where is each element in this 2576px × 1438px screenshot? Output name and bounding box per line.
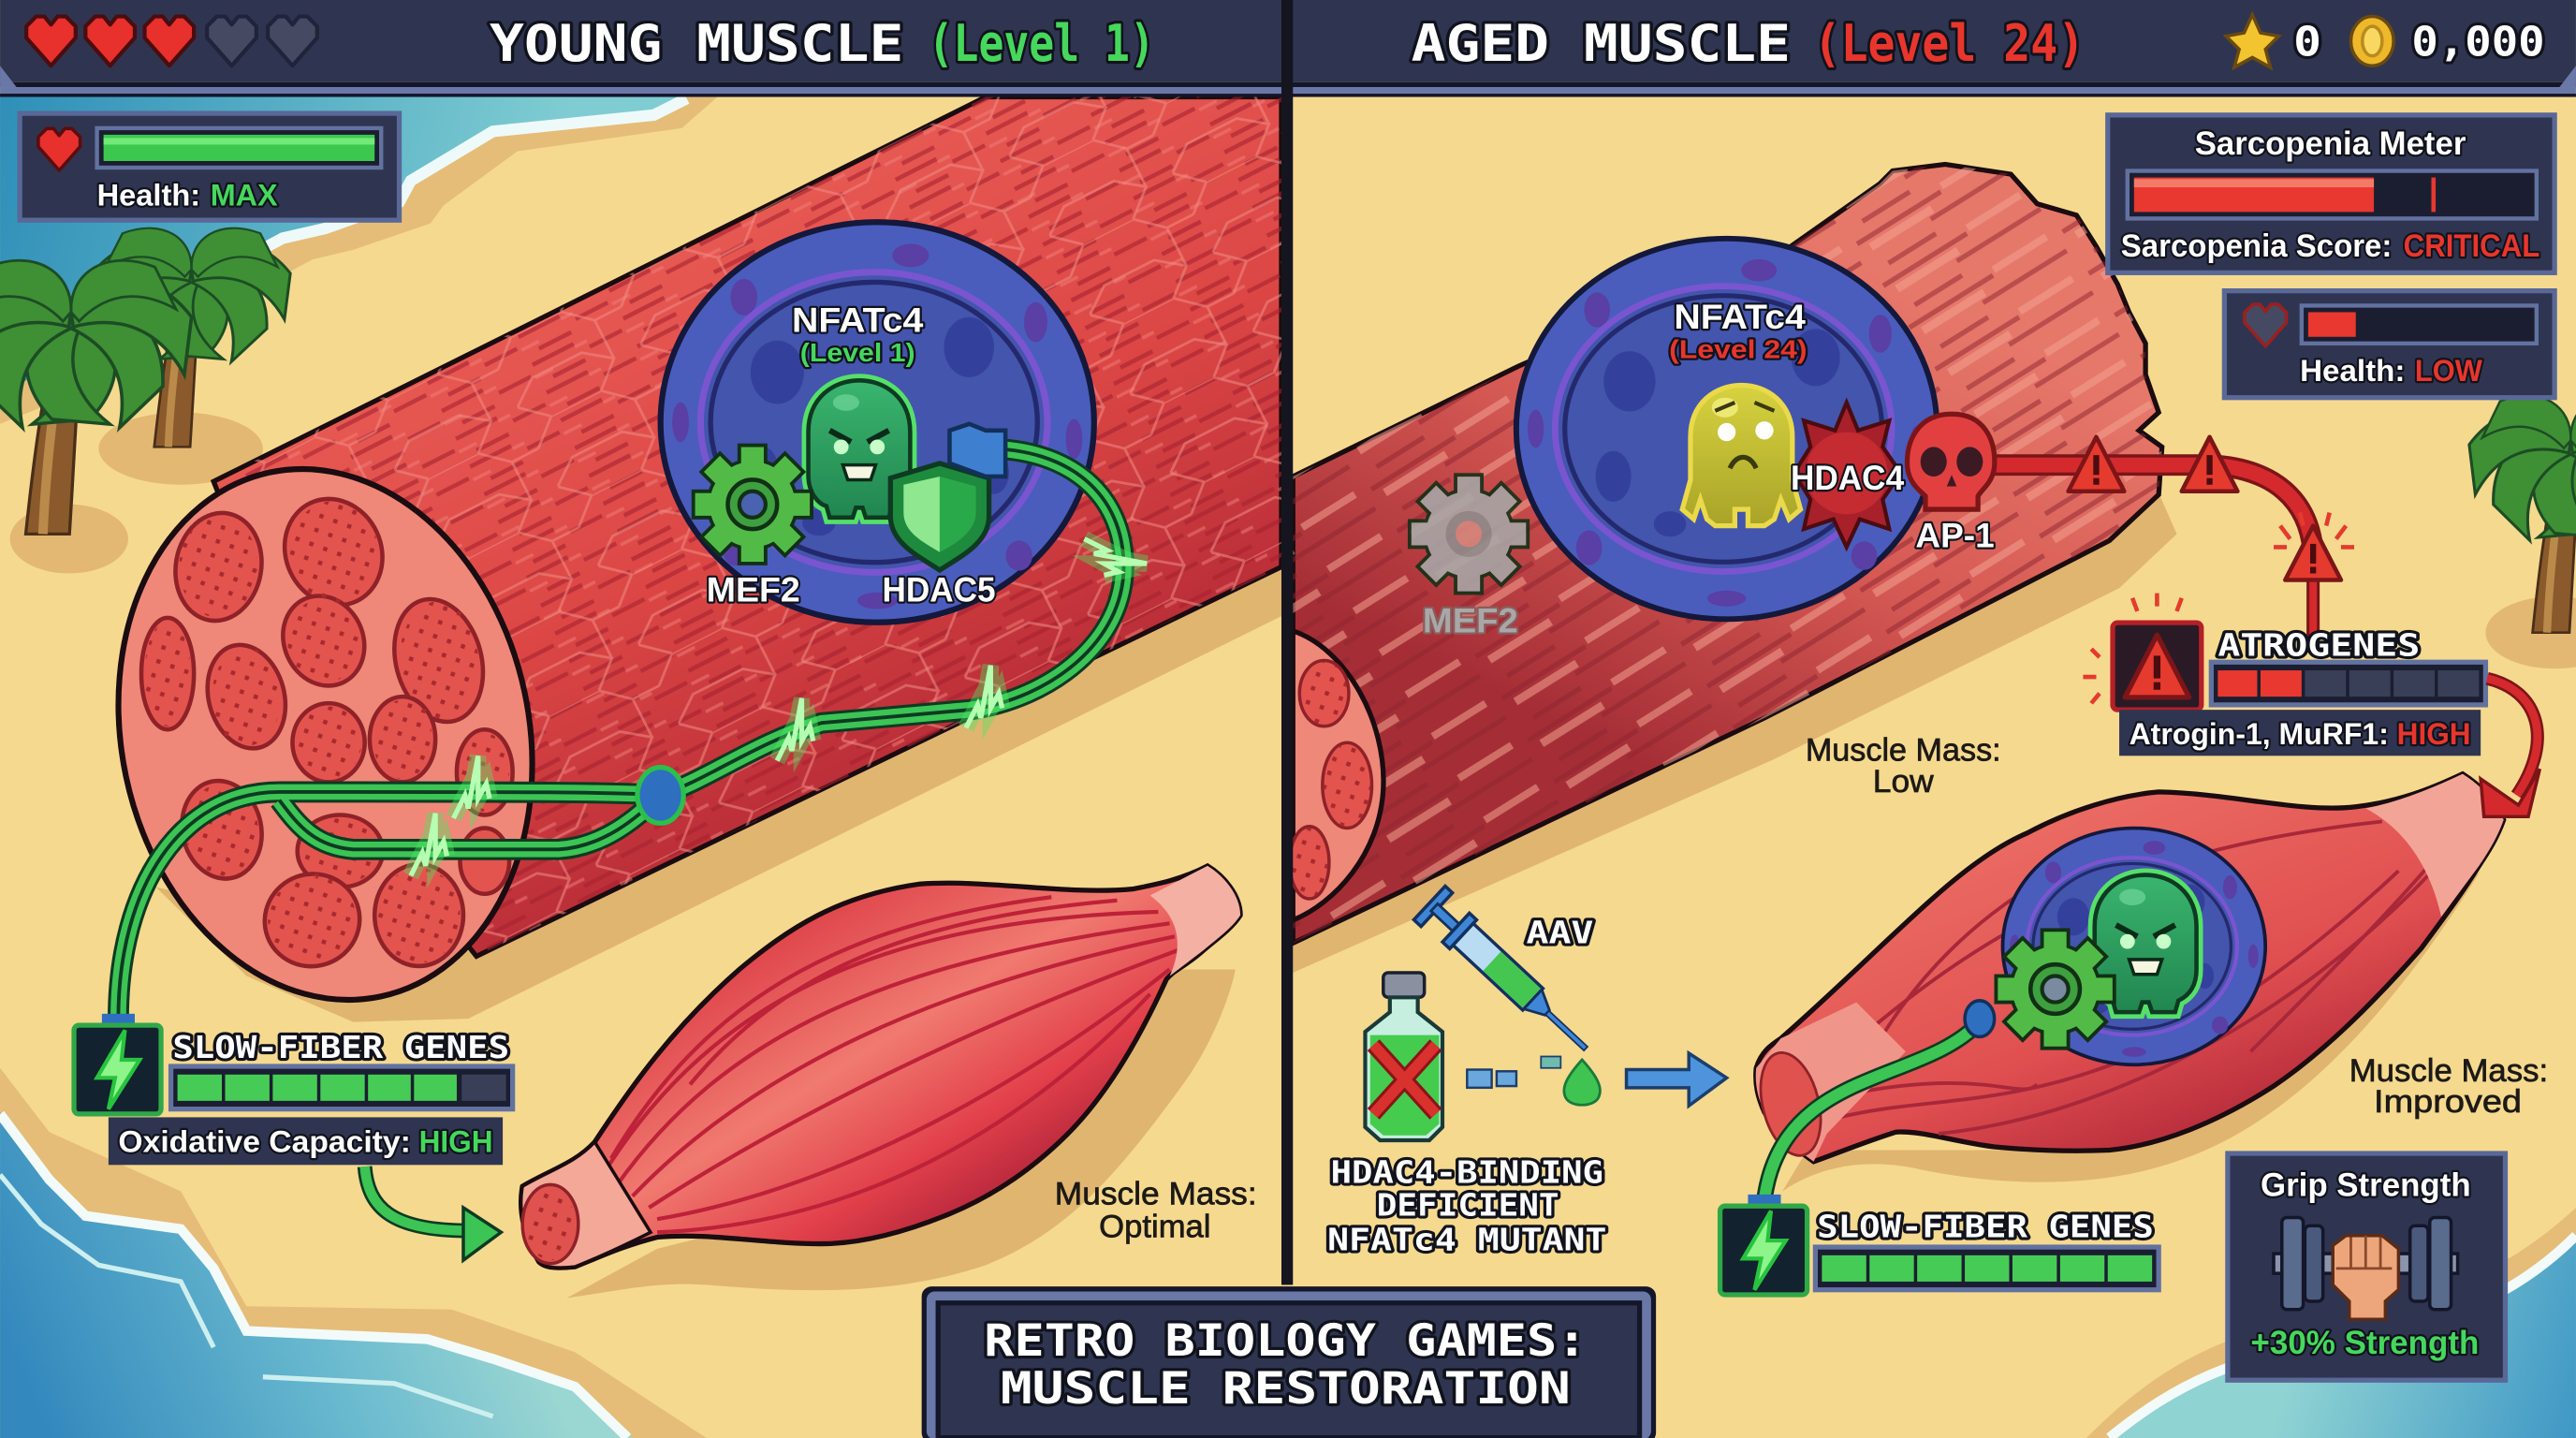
title: aged muscle: AGED MUSCLE [1412,14,1791,73]
label: muscle mass improved: Improved [2374,1084,2522,1120]
atrogin text [2119,710,2481,756]
icon: vial with red X [1365,973,1442,1140]
sparks on wire [411,539,1147,875]
panel: health max [20,113,400,220]
shadow: improved muscle [1782,871,2481,1191]
muscle cylinder body [213,97,1281,956]
title: young muscle: (Level 1) [929,14,1155,73]
mutant label [1327,1154,1606,1258]
NFATc4 label: NFATc4 [792,301,924,340]
plug: wire connector [949,424,1005,477]
character: restored green NFATc4 [2095,875,2197,1012]
ocean: bottom right shore [2086,1208,2576,1438]
title: aged muscle: (Level 24) [1814,14,2085,73]
grip heading: Grip Strength [2261,1167,2471,1204]
bar: sarcopenia [2128,171,2537,218]
icon: coin [2351,17,2393,66]
bar: health full [97,128,381,168]
delivery flow: capsid fragments and arrow [1467,1053,1727,1106]
icon: AP-1 skull [1907,414,1995,509]
mutant label: HDAC4-BINDING [1331,1154,1603,1191]
nucleus: young [661,222,1094,623]
muscle cross-section [70,430,580,1039]
icon: battery bolt [74,1014,161,1114]
title: young muscle: YOUNG MUSCLE [490,14,903,73]
oxidative capacity text: Oxidative Capacity: [118,1124,411,1158]
health text: Health: [97,178,200,212]
icon: atrogene warning [2083,594,2202,710]
label: muscle mass optimal: Optimal [1099,1210,1211,1245]
slow-fiber heading: SLOW-FIBER GENES [1817,1209,2154,1245]
label: muscle mass optimal: Muscle Mass: [1055,1176,1257,1211]
icon: HDAC5 shield [890,463,989,570]
label: muscle mass improved: Muscle Mass: [2349,1053,2548,1089]
label: muscle mass low: Muscle Mass: [1806,733,2001,769]
icon: star [2226,15,2278,67]
icon: heart [38,128,80,170]
red signal line [1995,465,2313,638]
star count: 0 [2293,19,2321,66]
NFATc4 aged label: (Level 24) [1669,335,1808,364]
icon: syringe AAV [1413,886,1602,1065]
NFATc4 aged label [1669,298,1808,364]
bar: slow-fiber full [1815,1247,2159,1290]
main title plaque [922,1286,1656,1438]
icon: restored MEF2 gear [1996,930,2115,1049]
MEF2 inactive label: MEF2 [1423,602,1518,640]
icon: HDAC4 spiked ball [1794,403,1901,547]
AP-1 label: AP-1 [1915,516,1995,554]
plus 30 percent strength: +30% Strength [2250,1325,2479,1361]
shadow: muscle cylinder [156,566,1281,1022]
title: aged muscle [1412,14,2085,73]
bar: health low [2302,305,2537,344]
NFATc4 label: (Level 1) [800,338,915,367]
sarcopenia score [2121,228,2539,264]
NFATc4 label [792,301,924,367]
muscle: improved spindle [1751,774,2504,1162]
mutant label: DEFICIENT [1377,1187,1559,1224]
ocean: bottom left shore [0,1068,707,1438]
ocean: top left shore [0,92,723,424]
atrogin text: HIGH [2397,717,2471,751]
panel: slow-fiber genes restored [1720,1195,2159,1295]
icon: inactive MEF2 gear [1410,475,1528,594]
title text: RETRO BIOLOGY GAMES: [984,1315,1587,1367]
panel: aged muscle scene [1290,115,2554,1380]
muscle: optimal spindle [521,866,1240,1268]
health low text [2300,354,2482,388]
palm trees: left [0,211,297,534]
panel: health low [2224,291,2554,398]
icon: battery bolt [1720,1195,1808,1295]
NFATc4 aged label: NFATc4 [1674,298,1806,336]
lives: hearts [26,17,317,66]
icon: dumbbell and fist [2274,1217,2458,1319]
shadow: optimal muscle [567,969,1236,1298]
wire: restored signal [1764,1022,1980,1199]
icon: MEF2 gear [694,446,812,564]
nucleus: aged [1516,239,1937,619]
health low text: Health: [2300,354,2405,388]
aged muscle body [1293,165,2162,943]
health text [97,178,278,212]
label: muscle mass improved [2349,1053,2548,1120]
arrow: genes to muscle [365,1167,501,1260]
coin count: 0,000 [2411,19,2545,66]
bar: atrogenes [2211,662,2485,705]
node: restored junction [1965,1001,1995,1036]
atrogin text: Atrogin-1, MuRF1: [2130,717,2389,751]
bar: slow-fiber 6 of 7 [171,1066,513,1109]
panel: atrogenes [2083,594,2485,756]
MEF2 label: MEF2 [707,570,800,609]
label: muscle mass optimal [1055,1176,1257,1245]
panel: sarcopenia meter [2108,115,2554,272]
palm tree: right [2462,376,2576,633]
label: muscle mass low [1806,733,2001,800]
node: wire junction [637,768,683,823]
panel: slow-fiber genes young [74,1014,513,1165]
mutant label: NFATc4 MUTANT [1327,1222,1606,1258]
panel: grip strength [2228,1153,2505,1380]
atrogenes heading: ATROGENES [2217,626,2420,663]
character: green NFATc4 [809,380,910,518]
title text: MUSCLE RESTORATION [1001,1363,1571,1415]
health low text: LOW [2415,354,2482,388]
aged muscle cross-section [1290,631,1383,920]
nucleus: restored [2003,829,2265,1064]
title text [984,1315,1587,1415]
title: young muscle [490,14,1155,73]
signal wire [118,448,1123,1019]
health text: MAX [211,178,278,212]
oxidative capacity text: HIGH [419,1124,493,1158]
HDAC5 label: HDAC5 [883,570,996,609]
palm shadows [10,413,2576,668]
oxidative capacity text [109,1117,503,1165]
label: muscle mass low: Low [1873,764,1934,800]
character: yellow aged NFATc4 [1682,386,1801,526]
panel: young muscle scene [20,97,1281,1298]
icon: empty heart [2245,304,2287,346]
sarcopenia heading: Sarcopenia Meter [2195,125,2466,162]
arrow: atrogenes to muscle [2487,679,2538,795]
sarcopenia score: CRITICAL [2404,228,2539,264]
red arrowhead [2481,769,2539,816]
AAV label: AAV [1526,914,1593,950]
sarcopenia score: Sarcopenia Score: [2121,228,2392,264]
divider between panels [1281,0,1293,1284]
slow-fiber heading: SLOW-FIBER GENES [172,1029,509,1065]
HDAC4 label: HDAC4 [1791,459,1905,497]
warning triangles [2069,437,2354,580]
shadow: aged muscle [1293,493,2176,973]
header bar [0,0,2576,97]
